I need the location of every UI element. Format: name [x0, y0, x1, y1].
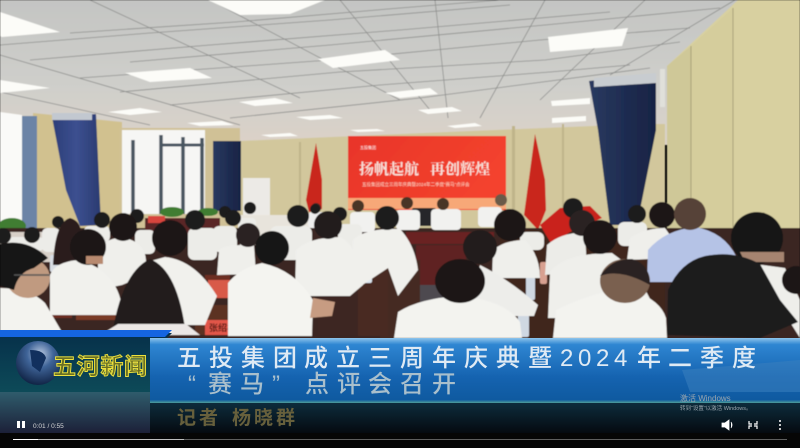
dark reporter band — [150, 403, 800, 433]
activation watermark — [680, 393, 752, 412]
middle rows of attendees — [50, 198, 737, 336]
icon: globe — [16, 341, 60, 385]
time counter: 0:01 / 0:55 — [33, 423, 64, 430]
windows — [0, 112, 205, 232]
reporter credit: 记者杨晓群 — [177, 407, 295, 429]
red coat — [540, 206, 602, 245]
red LED screen: 五投集团 — [360, 144, 376, 150]
headline text — [177, 345, 756, 398]
activation watermark: 转到“设置”以激活 Windows。 — [680, 404, 752, 412]
news lower-third banner — [0, 330, 800, 448]
red LED screen: 扬帆起航 — [359, 160, 419, 178]
headline text: 五投集团成立三周年庆典暨2024年二季度 — [177, 345, 756, 372]
icon: more menu — [779, 420, 781, 430]
progress bar — [13, 439, 787, 440]
floor and furniture — [0, 215, 800, 340]
ceiling — [0, 0, 800, 145]
activation watermark: 激活 Windows — [680, 393, 731, 403]
blue headline band — [150, 338, 800, 403]
red LED screen — [348, 136, 506, 210]
left logo panel — [0, 330, 172, 433]
long-haired woman, middle row — [53, 218, 81, 265]
video player controls — [0, 420, 800, 448]
icon: exit fullscreen — [749, 421, 757, 429]
red LED screen: 再创辉煌 — [430, 160, 490, 178]
headline text: “赛马”点评会召开 — [188, 371, 456, 398]
meeting room photo — [0, 0, 800, 340]
icon: volume — [722, 420, 732, 430]
floor and furniture: 张绍彬 — [209, 322, 236, 333]
ceiling lights — [0, 0, 628, 137]
curtains — [52, 69, 665, 226]
red flags — [306, 134, 546, 230]
plants — [0, 207, 218, 234]
presidium officials — [308, 194, 507, 232]
walls — [33, 0, 800, 270]
red LED screen: 五投集团成立三周年庆典暨2024年二季度“赛马”点评会 — [362, 181, 470, 188]
channel logo text: 五河新闻 — [53, 353, 147, 379]
back rows of attendees — [0, 198, 647, 260]
front row attendees — [0, 212, 800, 338]
icon: pause — [17, 421, 25, 428]
